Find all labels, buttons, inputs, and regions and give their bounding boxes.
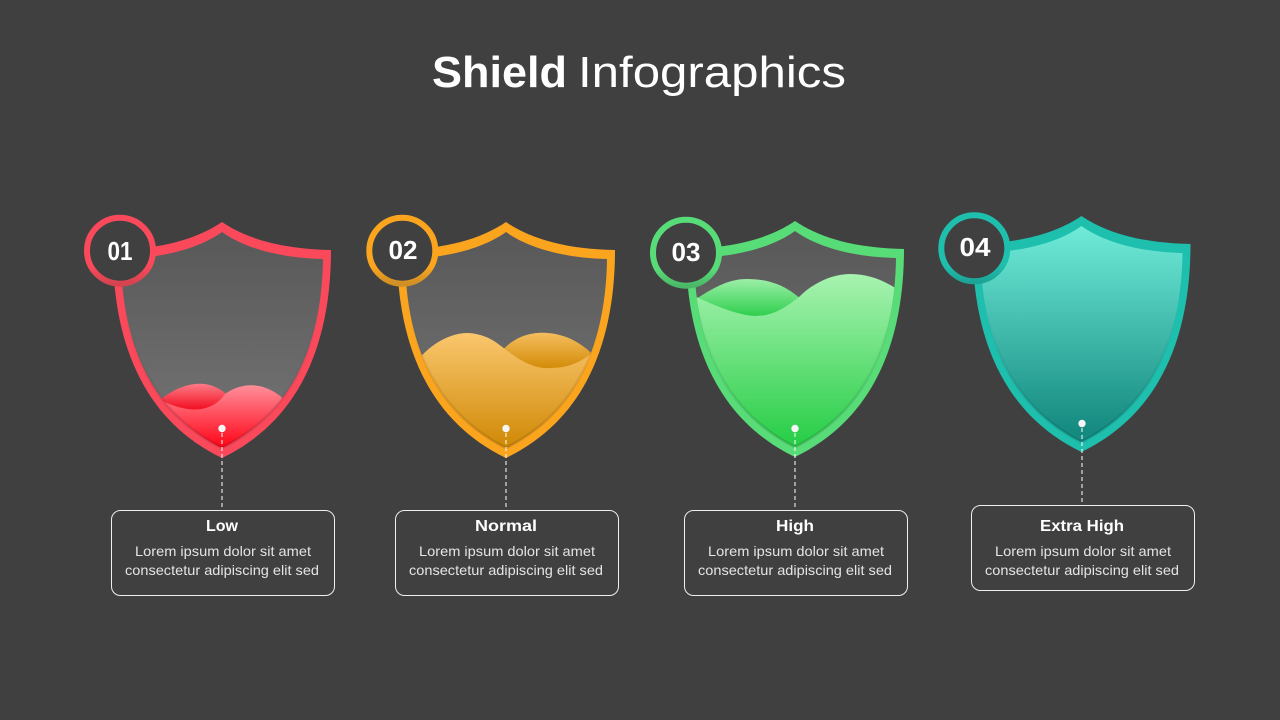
shield: green, high level <box>686 221 904 461</box>
text box: High: Lorem ipsum dolor sit amet <box>708 543 884 559</box>
text box: Extra High <box>972 506 1194 590</box>
text box: Low: Low <box>206 518 239 535</box>
panel: 01 Low <box>87 218 334 595</box>
connector <box>218 425 226 510</box>
text box: Low <box>112 510 334 596</box>
shield: red, low level <box>113 222 331 462</box>
number badge 02: 02 <box>388 235 418 265</box>
shield: teal, full level <box>972 216 1190 452</box>
shield: orange, normal level <box>397 222 615 462</box>
text box: Normal: consectetur adipiscing elit sed <box>409 562 603 578</box>
connector <box>791 425 799 510</box>
title: Infographics <box>578 48 846 97</box>
text box: Extra High: Lorem ipsum dolor sit amet <box>995 543 1171 559</box>
panel: 04 Extra High <box>941 215 1194 591</box>
connector <box>1078 420 1086 505</box>
number badge 03 <box>653 220 719 286</box>
number badge 02 <box>369 218 435 284</box>
number badge 04: 04 <box>960 232 991 262</box>
text box: High <box>684 510 908 596</box>
connector <box>502 425 510 510</box>
panel: 02 Normal <box>369 218 618 595</box>
number badge 01 <box>87 218 153 284</box>
number badge 04 <box>941 215 1007 281</box>
text box: Low: consectetur adipiscing elit sed <box>125 562 319 578</box>
number badge 01: 01 <box>108 236 132 266</box>
title <box>432 48 846 97</box>
text box: Extra High: Extra High <box>1040 518 1124 535</box>
text box: Normal: Normal <box>475 518 537 535</box>
number badge 03: 03 <box>672 237 700 267</box>
text box: High: High <box>776 518 814 535</box>
text box: High: consectetur adipiscing elit sed <box>698 562 892 578</box>
text box: Normal <box>396 510 618 596</box>
title: Shield <box>432 48 567 97</box>
text box: Extra High: consectetur adipiscing elit sed <box>985 562 1179 578</box>
panel: 03 High <box>653 220 908 595</box>
text box: Normal: Lorem ipsum dolor sit amet <box>419 543 595 559</box>
text box: Low: Lorem ipsum dolor sit amet <box>135 543 311 559</box>
